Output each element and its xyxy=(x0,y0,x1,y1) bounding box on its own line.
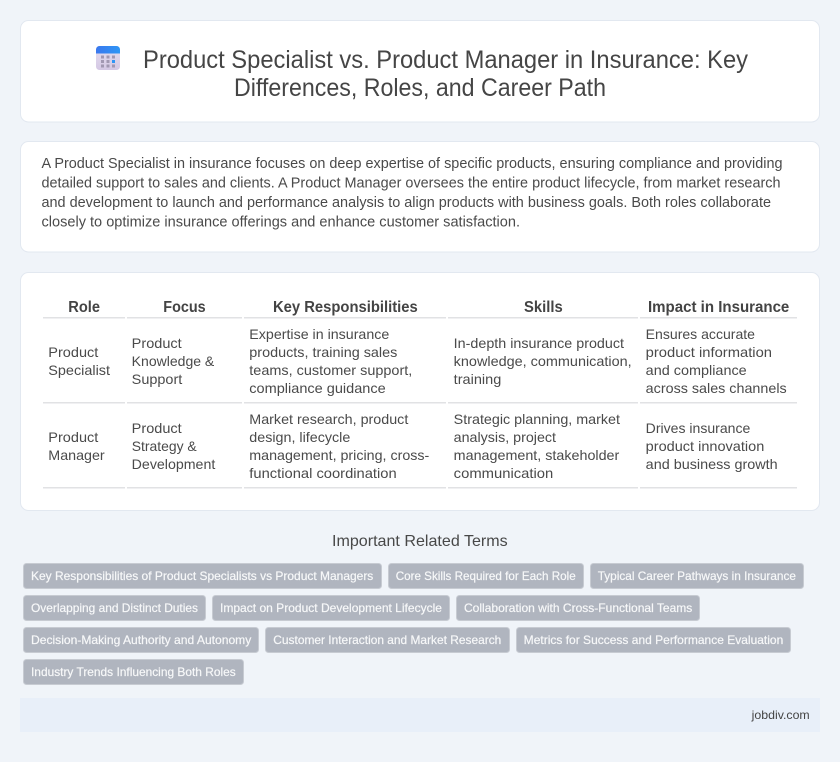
tag: Overlapping and Distinct Duties xyxy=(31,601,198,615)
tag: Industry Trends Influencing Both Roles xyxy=(31,665,236,679)
tag xyxy=(590,564,804,588)
tag xyxy=(212,596,450,620)
table row: Product Specialist: Product xyxy=(48,344,98,360)
tag xyxy=(516,628,790,652)
tag xyxy=(24,628,258,652)
panel: related term tags xyxy=(24,564,804,684)
table row: Product Specialist: across sales channels xyxy=(646,380,787,396)
footer source text: jobdiv.com xyxy=(751,708,810,722)
tag xyxy=(24,596,206,620)
tag: Metrics for Success and Performance Evaluation xyxy=(524,633,783,647)
tag: Impact on Product Development Lifecycle xyxy=(220,601,442,615)
title: Differences, Roles, and Career Path xyxy=(234,74,606,102)
table row: Product Manager: Product xyxy=(48,429,98,445)
table row: Product Specialist: product information xyxy=(646,344,772,360)
title xyxy=(143,46,748,102)
heading: related terms: Important Related Terms xyxy=(332,533,508,550)
table row: Product Specialist: training xyxy=(454,371,501,387)
table row: Product Specialist: Expertise in insurance xyxy=(249,326,390,342)
table row: Product Manager: product innovation xyxy=(646,438,764,454)
panel: summary paragraph xyxy=(20,142,820,252)
table row: Product Manager: Manager xyxy=(48,447,105,463)
table row: Product Manager: Development xyxy=(132,456,215,472)
tag: Key Responsibilities of Product Specialists vs Product Managers xyxy=(31,569,373,583)
text block: summary: A Product Specialist in insurance focuses on deep expertise of specific products, ensuring compliance and providing xyxy=(42,155,782,172)
table row: Product Specialist: In-depth insurance product xyxy=(454,335,624,351)
text block: summary: closely to optimize insurance offerings and enhance customer satisfaction. xyxy=(42,214,520,230)
table row: Product Specialist: and compliance xyxy=(646,362,747,378)
table row: Product Manager: Strategic planning, market xyxy=(454,411,620,427)
table row: Product Specialist: Ensures accurate xyxy=(646,326,755,342)
table row: Product Specialist: knowledge, communication, xyxy=(454,353,632,369)
table row: Product Manager: and business growth xyxy=(646,456,778,472)
table row: Product Specialist: Specialist xyxy=(48,362,110,378)
footer bar xyxy=(20,698,820,732)
table row: Product Specialist: Support xyxy=(132,371,182,387)
text block: summary: and development to launch and performance analysis to align products with business goals. Both roles collaborate xyxy=(42,194,771,211)
table row: Product Manager: Market research, product xyxy=(249,411,408,427)
table row: Product Manager: communication xyxy=(454,465,553,481)
table header row: Impact in Insurance xyxy=(648,299,789,316)
table row: Product Manager: design, lifecycle xyxy=(249,429,351,445)
tag: Customer Interaction and Market Research xyxy=(273,633,501,647)
icon: calendar xyxy=(96,46,120,70)
tag xyxy=(388,564,584,588)
tag xyxy=(456,596,700,620)
text block: summary xyxy=(42,155,782,230)
table row: Product Manager: functional coordination xyxy=(249,465,397,481)
table row: Product Manager: Product xyxy=(132,420,182,436)
table row: Product Manager xyxy=(48,411,778,481)
table row: Product Manager: management, pricing, cross- xyxy=(249,447,430,463)
table header row xyxy=(68,299,789,316)
table row: Product Specialist: Knowledge & xyxy=(132,353,215,369)
text block: summary: detailed support to sales and clients. A Product Manager oversees the entire product lifecycle, from market research xyxy=(42,174,780,192)
table row: Product Specialist xyxy=(48,326,787,396)
tag: Collaboration with Cross-Functional Teams xyxy=(464,601,692,615)
table row: Product Manager: Drives insurance xyxy=(646,420,751,436)
table header row: Role xyxy=(68,299,100,316)
table header row: Focus xyxy=(163,299,206,316)
table row: Product Specialist: teams, customer support, xyxy=(249,362,412,378)
tag xyxy=(24,660,244,684)
panel: title header xyxy=(20,20,820,122)
tag xyxy=(24,564,382,588)
table row: Product Specialist: products, training sales xyxy=(249,344,397,360)
table row: Product Specialist: Product xyxy=(132,335,182,351)
table row: Product Manager: analysis, project xyxy=(454,429,556,445)
table row: Product Manager: management, stakeholder xyxy=(454,447,620,463)
table header row: Key Responsibilities xyxy=(273,299,418,316)
table row: Product Manager: Strategy & xyxy=(132,438,197,454)
table header row: Skills xyxy=(524,299,563,316)
tag: Typical Career Pathways in Insurance xyxy=(598,569,796,583)
panel: comparison table xyxy=(20,272,820,510)
title: Product Specialist vs. Product Manager in Insurance: Key xyxy=(143,46,748,74)
tag: Decision-Making Authority and Autonomy xyxy=(31,633,251,647)
tag xyxy=(266,628,510,652)
table row: Product Specialist: compliance guidance xyxy=(249,380,386,396)
tag: Core Skills Required for Each Role xyxy=(396,569,576,583)
